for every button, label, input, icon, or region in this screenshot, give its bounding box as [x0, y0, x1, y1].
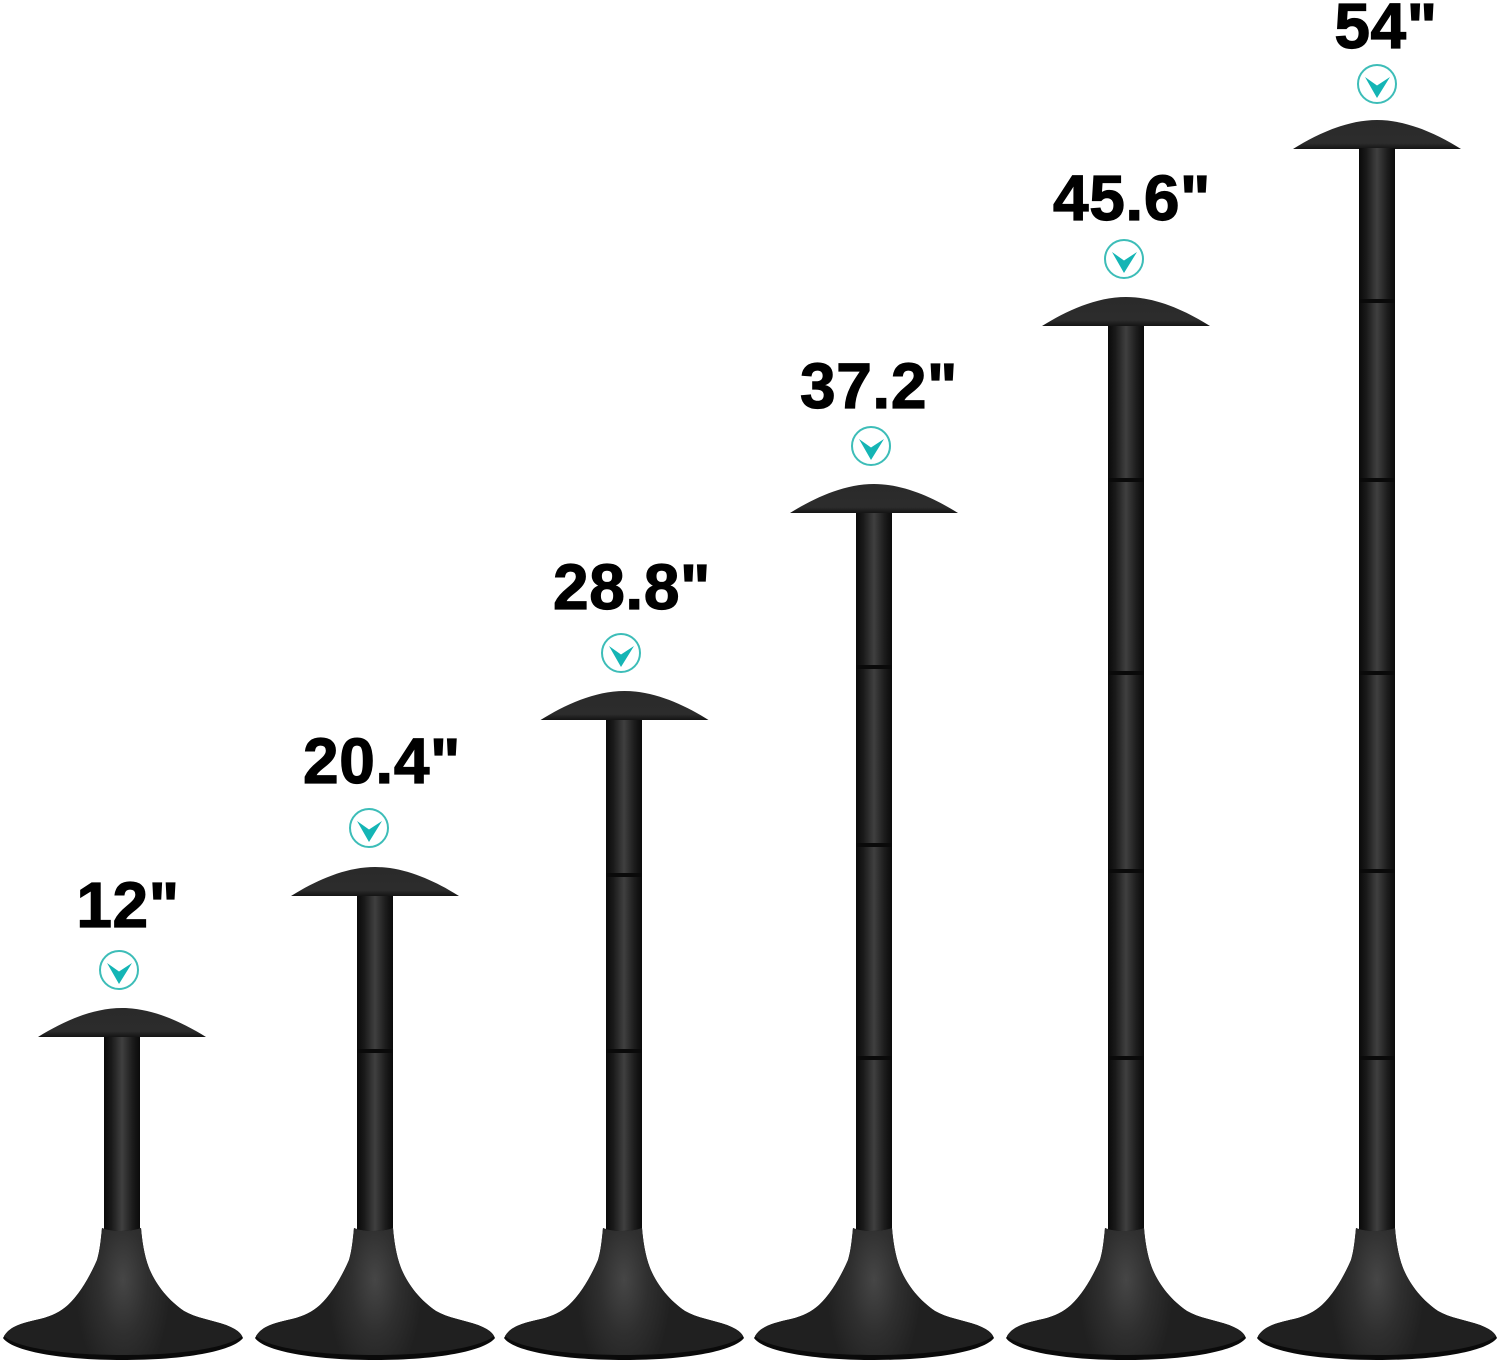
stand: 37.2 inch: [754, 350, 994, 1360]
height label: 20.4 inch: 20.4": [303, 725, 461, 797]
stand: 20.4 inch: [255, 725, 495, 1360]
pole: 28.8 inch: [606, 720, 642, 1232]
pole: 45.6 inch: [1108, 326, 1144, 1232]
icon: down arrow 20.4 inch: [350, 809, 388, 847]
pole: 37.2 inch: [856, 513, 892, 1232]
icon: down arrow 45.6 inch: [1105, 240, 1143, 278]
pole: 54 inch: [1359, 148, 1395, 1232]
icon: down arrow 12 inch: [100, 951, 138, 989]
height label: 45.6 inch: 45.6": [1053, 162, 1211, 234]
base: 54 inch: [1257, 1228, 1497, 1360]
base: 37.2 inch: [754, 1228, 994, 1360]
stand: 12 inch: [3, 869, 243, 1360]
height label: 12 inch: 12": [76, 869, 180, 941]
cap: 28.8 inch: [540, 691, 708, 720]
stand: 54 inch: [1257, 0, 1497, 1360]
height label: 28.8 inch: 28.8": [553, 551, 711, 623]
cap: 45.6 inch: [1042, 297, 1210, 326]
stand: 28.8 inch: [504, 551, 744, 1360]
cap: 12 inch: [38, 1008, 206, 1037]
base: 12 inch: [3, 1228, 243, 1360]
pole: 20.4 inch: [357, 896, 393, 1232]
icon: down arrow 28.8 inch: [602, 634, 640, 672]
cap: 37.2 inch: [790, 484, 958, 513]
pole: 12 inch: [104, 1037, 140, 1232]
cap: 20.4 inch: [291, 867, 459, 896]
base: 28.8 inch: [504, 1228, 744, 1360]
icon: down arrow 37.2 inch: [852, 427, 890, 465]
base: 45.6 inch: [1006, 1228, 1246, 1360]
icon: down arrow 54 inch: [1358, 65, 1396, 103]
stand: 45.6 inch: [1006, 162, 1246, 1360]
base: 20.4 inch: [255, 1228, 495, 1360]
cap: 54 inch: [1293, 120, 1461, 149]
height label: 37.2 inch: 37.2": [800, 350, 958, 422]
